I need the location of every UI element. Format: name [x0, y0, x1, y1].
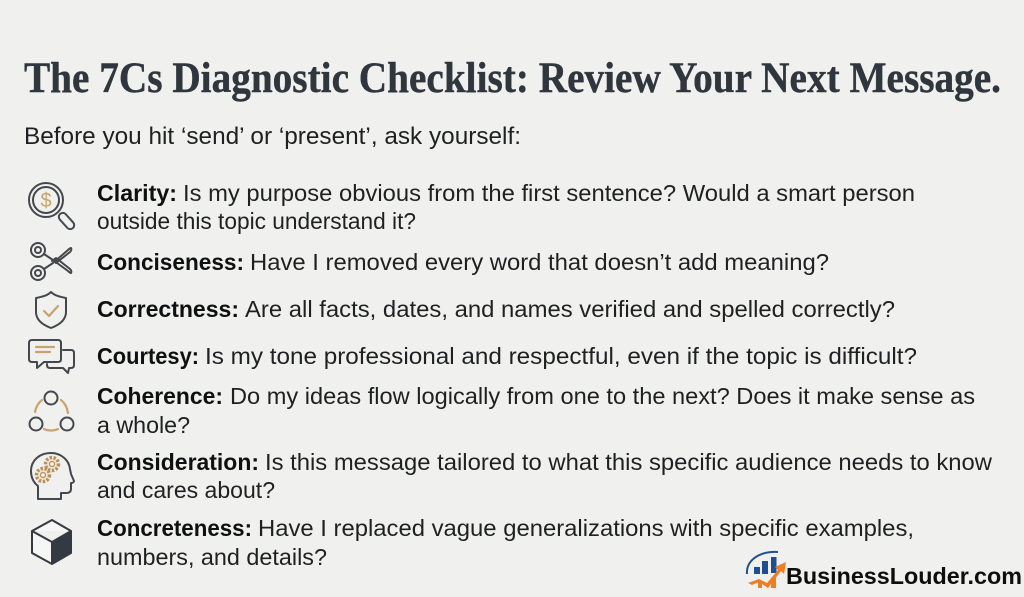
- checklist item: Courtesy: [29, 340, 917, 373]
- checklist item: Concreteness: [32, 515, 914, 570]
- icon: cube: [32, 520, 71, 564]
- checklist item: Coherence: [30, 383, 975, 438]
- correctness text: Correctness:: [97, 296, 239, 322]
- courtesy text: Is my tone professional and respectful, even if the topic is difficult?: [205, 343, 917, 369]
- coherence text: [97, 383, 975, 438]
- icon: three connected circles: [30, 392, 74, 430]
- icon: shield with check: [36, 292, 66, 328]
- conciseness text: Conciseness:: [97, 249, 244, 275]
- concreteness text: Concreteness:: [97, 515, 252, 541]
- icon: speech bubbles: [29, 340, 74, 373]
- concreteness text: Have I replaced vague generalizations with specific examples,: [258, 515, 914, 541]
- concreteness text: [97, 515, 914, 570]
- coherence text: Do my ideas flow logically from one to the next? Does it make sense as: [230, 383, 975, 409]
- checklist item: Conciseness: [31, 243, 829, 280]
- brand logo: BusinessLouder.com: [747, 552, 1022, 589]
- clarity text: Is my purpose obvious from the first sentence? Would a smart person: [183, 180, 915, 206]
- icon: magnifying glass with dollar sign: $: [40, 190, 52, 212]
- checklist item: Consideration: [31, 449, 993, 503]
- correctness text: Are all facts, dates, and names verified and spelled correctly?: [245, 296, 895, 322]
- clarity text: Clarity:: [97, 180, 177, 206]
- subtitle: Before you hit ‘send’ or ‘present’, ask yourself:: [24, 123, 521, 150]
- icon: magnifying glass with dollar sign: [29, 183, 76, 231]
- consideration text: Is this message tailored to what this specific audience needs to know: [265, 449, 993, 475]
- clarity text: [97, 180, 915, 234]
- coherence text: a whole?: [97, 412, 190, 438]
- checklist item: Correctness: [36, 292, 895, 328]
- coherence text: Coherence:: [97, 383, 223, 409]
- icon: scissors: [31, 243, 71, 280]
- courtesy text: Courtesy:: [97, 343, 199, 369]
- consideration text: and cares about?: [97, 477, 275, 503]
- concreteness text: numbers, and details?: [97, 544, 327, 570]
- conciseness text: Have I removed every word that doesn’t add meaning?: [250, 249, 829, 275]
- brand name: BusinessLouder.com: [786, 563, 1022, 589]
- checklist item: Clarity: [29, 180, 915, 234]
- consideration text: [97, 449, 993, 503]
- icon: head with gears: [31, 453, 74, 499]
- icon: logo chart with arrow: [747, 552, 786, 588]
- clarity text: outside this topic understand it?: [97, 208, 416, 234]
- consideration text: Consideration:: [97, 449, 259, 475]
